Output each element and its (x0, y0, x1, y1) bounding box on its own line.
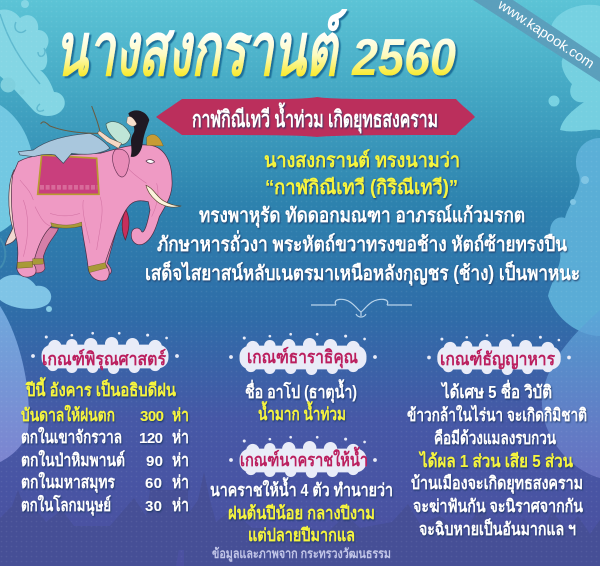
panel: rainfall list: 60 (145, 475, 162, 492)
panel: rainfall list: ห่า (172, 427, 189, 447)
tusk (146, 185, 181, 207)
elephant shading (20, 167, 158, 257)
source credit: ข้อมูลและภาพจาก กระทรวงวัฒนธรรม (212, 546, 391, 562)
panel: rainfall list: ตกในโลกมนุษย์ (21, 494, 111, 516)
panel: rainfall list: ตกในเขาจักรวาล (21, 426, 122, 447)
far hind leg (32, 227, 58, 273)
tassel (122, 210, 129, 240)
badge: Thara Thikhun (229, 333, 377, 375)
panel: water element: ชื่อ อาโป (ธาตุน้ำ) (245, 379, 357, 403)
panel: rainfall list: ตกในป่าหิมพานต์ (21, 449, 125, 470)
badge: Naga water (229, 436, 377, 478)
panel: naga prediction: ฝนต้นปีน้อย กลางปีงาม (228, 503, 375, 523)
subtitle banner (156, 97, 475, 137)
subtitle banner: กาฬกิณีเทวี น้ำท่วม เกิดยุทธสงคราม (192, 102, 438, 134)
panel: rainfall list: 120 (139, 430, 163, 447)
badge: Phirun Sat: เกณฑ์พิรุณศาสตร์ (42, 348, 166, 371)
panel: naga prediction (210, 477, 393, 545)
rider face (127, 117, 137, 126)
illustration: goddess lying on pink elephant (5, 106, 181, 281)
description text (145, 204, 580, 286)
panel: crop prediction: ได้เศษ 5 ชื่อ วิบัติ (440, 379, 552, 402)
rider hair (128, 110, 149, 157)
description text: ทรงพาหุรัด ทัดดอกมณฑา อาภรณ์แก้วมรกต (199, 204, 525, 228)
panel: crop prediction: ได้ผล 1 ส่วน เสีย 5 ส่วน (418, 450, 573, 471)
far front leg (100, 223, 118, 275)
name heading: “กาฬกิณีเทวี (กิริณีเทวี)” (265, 176, 458, 199)
rider legs (18, 133, 110, 163)
elephant ear (113, 149, 129, 177)
badge: Naga water: เกณฑ์นาคราชให้น้ำ (240, 446, 368, 470)
saddle trim (40, 180, 97, 194)
panel: rainfall list: 90 (146, 453, 163, 470)
panel: rainfall list: ห่า (172, 472, 189, 492)
panel: rainfall list: 30 (145, 498, 162, 515)
badge: Thanya Han: เกณฑ์ธัญญาหาร (440, 348, 555, 370)
ornament divider (311, 299, 412, 317)
panel: rainfall list: ตกในมหาสมุทร (21, 471, 115, 493)
anklets (17, 134, 163, 273)
panel: water element (245, 379, 357, 424)
panel: rainfall list: ห่า (172, 450, 189, 470)
elephant body (11, 145, 172, 281)
bow (41, 106, 100, 133)
rider arm (97, 131, 122, 148)
panel: crop prediction (407, 379, 587, 539)
decorative shape: lower right (542, 310, 600, 478)
panel: rainfall list: 300 (140, 408, 164, 425)
panel: rainfall list: บันดาลให้ฝนตก (21, 404, 115, 425)
saddle cloth (38, 155, 99, 194)
name heading (264, 149, 460, 199)
panel: crop prediction: คือมีด้วงแมลงรบกวน (434, 428, 556, 448)
panel: rainfall list (21, 377, 189, 516)
corner ribbon with website (473, 0, 600, 82)
panel: water element: น้ำมาก น้ำท่วม (258, 401, 346, 424)
title: 2560 (351, 29, 456, 87)
badge: Thara Thikhun: เกณฑ์ธาราธิคุณ (247, 346, 358, 369)
panel: rainfall list: ห่า (172, 405, 189, 425)
name heading: นางสงกรานต์ ทรงนามว่า (264, 149, 460, 172)
panel: naga prediction: แต่ปลายปีมากแล (248, 525, 355, 545)
rider torso (106, 122, 131, 144)
decorative cloud: top left (0, 0, 65, 312)
panel: naga prediction: นาคราชให้น้ำ 4 ตัว ทำนายว่า (210, 477, 393, 500)
badge: Thanya Han (427, 334, 571, 375)
decorative cloud: top right (548, 5, 600, 336)
tail (5, 170, 17, 245)
decorative shape: lower left (0, 306, 29, 462)
title: นางสงกรานต์ (55, 8, 347, 91)
panel: rainfall list: ห่า (172, 495, 189, 515)
bottom temple silhouette (0, 472, 600, 566)
badge: Phirun Sat (31, 332, 179, 374)
elephant eye (146, 160, 155, 163)
panel: rainfall list: ปีนี้ อังคาร เป็นอธิบดีฝน (25, 377, 176, 400)
